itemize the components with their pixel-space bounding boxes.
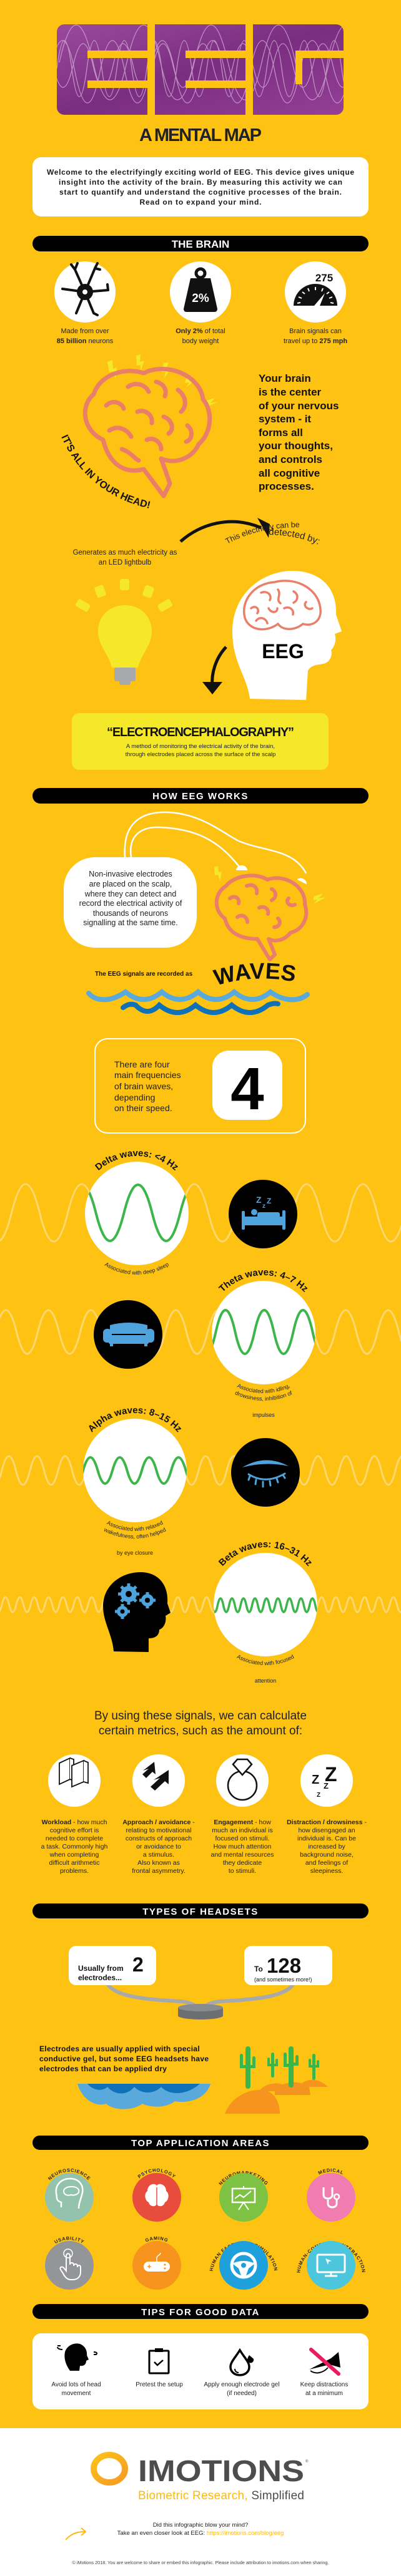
logo: iMotions: ®: [305, 2459, 309, 2464]
app: human factors & simulation: HUMAN FACTORS & SIMULATION: [209, 2242, 277, 2271]
metric: distraction: and feelings of: [305, 1859, 348, 1867]
callout: ELECTROENCEPHALOGRAPHY: through electrodes placed across the surface of the scalp: [126, 751, 275, 758]
metric: distraction: Z: [312, 1773, 319, 1787]
app: medical: MEDICAL: [318, 2169, 342, 2175]
metric: workload: Workload - how much: [42, 1819, 107, 1826]
app: neuromarketing: NEUROMARKETING: [219, 2171, 267, 2185]
heading: TOP APPLICATION AREAS: [32, 2136, 369, 2150]
app: human-computer interaction: [297, 2241, 365, 2290]
panel: four frequencies: There are four: [114, 1059, 170, 1069]
icon: head with gears: [103, 1572, 171, 1652]
panel: four frequencies: of brain waves,: [114, 1081, 173, 1091]
metric: approach avoidance: Also known as: [137, 1859, 180, 1867]
app: gaming: GAMING: [145, 2236, 167, 2242]
text: IT'S ALL IN YOUR HEAD: IT'S ALL IN YOUR HEAD!: [61, 434, 150, 508]
heading: THE BRAIN: THE BRAIN: [172, 238, 229, 250]
intro text box: start to quantify and understand the cognitive processes of the brain.: [59, 188, 342, 197]
tip: pretest setup: Pretest the setup: [136, 2381, 183, 2388]
panel: four frequencies: depending: [114, 1092, 155, 1102]
icon: electrodes: [236, 865, 308, 884]
panel: four frequencies: [95, 1039, 305, 1133]
speech bubble: electrodes text: are placed on the scalp,: [89, 880, 172, 888]
text: brain description: processes.: [259, 480, 314, 492]
metric: approach avoidance: frontal asymmetry.: [132, 1867, 186, 1875]
delta waves: Delta waves: <4 Hz: [95, 1151, 178, 1170]
metric: distraction: Z: [317, 1792, 320, 1799]
text: electrodes gel: conductive gel, but some EEG headsets have: [39, 2054, 209, 2063]
icon: headset band: [107, 1984, 294, 2019]
metric: distraction: Z: [325, 1763, 337, 1786]
theta waves: drowsiness, inhibition of: [235, 1390, 292, 1401]
metric: engagement: How much attention: [214, 1843, 272, 1850]
metric: workload: when completing: [49, 1851, 99, 1859]
subtitle: A MENTAL MAP: A MENTAL MAP: [139, 125, 262, 145]
heading: TYPES OF HEADSETS: [32, 1903, 369, 1918]
metric: approach avoidance: or avoidance to: [136, 1843, 181, 1850]
speech bubble: electrodes text: where they can detect and: [84, 890, 176, 898]
text: brain description: forms all: [259, 427, 303, 439]
tip: electrode gel: (if needed): [227, 2390, 257, 2397]
logo: iMotions: Biometric Research, Simplified: [138, 2489, 304, 2502]
callout: ELECTROENCEPHALOGRAPHY: A method of monitoring the electrical activity of the brain,: [126, 743, 275, 750]
heading: TIPS FOR GOOD DATA: [32, 2304, 369, 2319]
tip: head movement: Avoid lots of head: [51, 2381, 101, 2388]
heading: HOW EEG WORKS: HOW EEG WORKS: [152, 791, 249, 802]
tip: distractions: at a minimum: [305, 2390, 343, 2397]
theta waves: Associated with idling,: [237, 1384, 290, 1393]
text: detected by: detected by:: [269, 528, 320, 544]
callout: ELECTROENCEPHALOGRAPHY: “ELECTROENCEPHALOGRAPHY”: [107, 726, 294, 739]
metric: engagement: to stimuli.: [229, 1867, 256, 1875]
logo: iMotions: [94, 2455, 309, 2502]
panel: four frequencies: main frequencies: [114, 1070, 181, 1080]
metric: distraction: how disengaged an: [298, 1827, 355, 1834]
stat captions: Only 2% of total: [176, 328, 225, 335]
callout: to 128: (and sometimes more!): [254, 1976, 312, 1983]
icon: sleeping in bed: [229, 1180, 297, 1248]
alpha waves: Associated with relaxed: [106, 1520, 163, 1531]
metric: workload: [41, 1754, 108, 1875]
icon: desert cacti: [225, 2046, 328, 2114]
stat: neurons: [54, 261, 116, 323]
icon: sleeping in bed: Z: [267, 1197, 271, 1205]
metric: distraction: background noise,: [300, 1851, 354, 1859]
metric: engagement: focused on stimuli.: [215, 1835, 269, 1842]
intro text box: Read on to expand your mind.: [140, 198, 261, 207]
metric: workload: a task. Commonly high: [41, 1843, 108, 1850]
stat: weight: 2%: [192, 292, 209, 305]
footer call to action: Did this infographic blow your mind?: [153, 2522, 248, 2529]
metric: distraction: individual is. Can be: [297, 1835, 356, 1842]
app: psychology: PSYCHOLOGY: [137, 2169, 176, 2179]
heading: TOP APPLICATION AREAS: TOP APPLICATION AREAS: [131, 2138, 270, 2149]
beta waves: [214, 1542, 317, 1684]
text: LED lightbulb: an LED lightbulb: [99, 559, 151, 566]
speech bubble: electrodes text: record the electrical activity of: [79, 899, 182, 908]
app: human-computer interaction: HUMAN-COMPUTER INTERACTION: [297, 2242, 365, 2273]
tip: distractions: [300, 2350, 348, 2397]
wires: [125, 812, 306, 873]
icon: closed eye: [231, 1438, 300, 1507]
app: psychology: [132, 2169, 181, 2222]
stat captions: Made from over: [61, 328, 109, 335]
alpha waves: wakefulness, often helped: [104, 1527, 166, 1540]
app: usability: USABILITY: [54, 2236, 84, 2243]
text: recorded as WAVES: The EEG signals are recorded as: [95, 971, 193, 978]
app: gaming: [132, 2236, 181, 2290]
text: detected by: This electricity can be: [225, 522, 300, 543]
copyright: © iMotions 2018. You are welcome to share or embed this infographic. Please include attribution to imotions.com when sharing.: [72, 2560, 329, 2565]
metric: approach avoidance: a stimulus.: [143, 1851, 174, 1859]
speech bubble: electrodes text: Non-invasive electrodes: [89, 870, 172, 878]
delta waves: Associated with deep sleep: [104, 1263, 169, 1275]
panel: four frequencies: on their speed.: [114, 1103, 172, 1113]
speech bubble: electrodes text: signalling at the same time.: [83, 918, 178, 927]
metric: workload: difficult arithmetic: [49, 1859, 99, 1867]
text: electrodes gel: [39, 2044, 209, 2073]
metric: approach avoidance: Approach / avoidance -: [122, 1819, 195, 1826]
icon: blue waves: [89, 992, 307, 1013]
speech bubble: electrodes text: thousands of neurons: [93, 909, 168, 918]
icon: lightbulb: [75, 579, 173, 685]
heading: HOW EEG WORKS: [32, 788, 369, 804]
icon: brain with electrodes: [214, 866, 326, 960]
app: neuroscience: [45, 2169, 94, 2222]
text: electrodes gel: Electrodes are usually applied with special: [39, 2044, 200, 2053]
icon: sleeping in bed: z: [262, 1203, 265, 1210]
text: metrics intro: By using these signals, we can calculate: [94, 1709, 307, 1723]
app: usability: [45, 2236, 94, 2290]
panel: tips: [32, 2333, 369, 2409]
metric: engagement: [211, 1754, 274, 1875]
text: brain description: is the center: [259, 386, 322, 398]
intro text box: Welcome to the electrifyingly exciting world of EEG. This device gives unique: [47, 168, 354, 177]
heading: TIPS FOR GOOD DATA: TIPS FOR GOOD DATA: [141, 2307, 260, 2318]
text: recorded as WAVES: WAVES: [212, 963, 295, 984]
text: brain description: of your nervous: [259, 400, 339, 412]
text: brain description: [259, 372, 339, 492]
icon: lightning bolts: [107, 354, 218, 408]
tip: electrode gel: Apply enough electrode gel: [204, 2381, 280, 2388]
icon: head with brain: [232, 571, 342, 700]
icon: big brain: [85, 369, 210, 496]
metric: distraction: increased by: [308, 1843, 346, 1850]
theta waves: [212, 1270, 315, 1418]
tip: head movement: movement: [62, 2390, 91, 2397]
text: brain description: all cognitive: [259, 467, 320, 479]
alpha waves: by eye closure: [117, 1550, 153, 1556]
theta waves: Theta waves: 4–7 Hz: [218, 1270, 307, 1293]
alpha waves: [83, 1408, 187, 1556]
alpha waves: Alpha waves: 8–15 Hz: [89, 1408, 181, 1432]
stat captions: travel up to 275 mph: [284, 338, 347, 345]
icon: head with brain: EEG: [262, 640, 304, 663]
metric: workload: cognitive effort is: [50, 1827, 99, 1834]
metric: workload: needed to complete: [46, 1835, 103, 1842]
text: brain description: system - it: [259, 413, 311, 425]
text: brain description: Your brain: [259, 372, 311, 384]
text: LED lightbulb: Generates as much electricity as: [73, 549, 177, 557]
title: EEG logo: [50, 24, 363, 115]
text: recorded as WAVES: [95, 963, 295, 984]
callout: to 128: 128: [267, 1954, 301, 1977]
metric: engagement: much an individual is: [212, 1827, 273, 1834]
metric: engagement: and mental resources: [211, 1851, 274, 1859]
text: brain description: and controls: [259, 454, 322, 465]
metric: approach avoidance: relating to motivational: [126, 1827, 192, 1834]
icon: couch: [94, 1300, 162, 1369]
metric: approach avoidance: [122, 1754, 195, 1875]
callout: to 128: To: [254, 1965, 263, 1973]
metric: distraction: sleepiness.: [310, 1867, 343, 1875]
text: LED lightbulb: [73, 549, 177, 566]
stat captions: Brain signals can: [289, 328, 342, 335]
callout: from 2 electrodes: [69, 1946, 156, 1985]
text: brain description: your thoughts,: [259, 440, 333, 452]
metric: distraction: Z: [324, 1781, 329, 1791]
arrow: footer: [66, 2528, 86, 2540]
background wave bands: [0, 1184, 401, 1612]
metric: engagement: Engagement - how: [214, 1819, 271, 1826]
icon: gel cloud: [77, 2084, 210, 2109]
text: metrics intro: certain metrics, such as the amount of:: [99, 1724, 302, 1738]
stat: speed: 275: [315, 272, 333, 284]
app: neuromarketing: [219, 2171, 268, 2222]
beta waves: Beta waves: 16–31 Hz: [219, 1542, 312, 1566]
arrow: curved right: [181, 518, 270, 542]
text: electrodes gel: electrodes that can be applied dry: [39, 2064, 167, 2073]
arrow: curved down: [202, 647, 226, 694]
stat: speed: [285, 261, 346, 323]
panel: four frequencies: 4: [230, 1056, 264, 1122]
stat: weight: [170, 261, 231, 323]
metric: distraction: [287, 1754, 367, 1875]
app: medical: [307, 2169, 355, 2222]
icon: sleeping in bed: Z: [256, 1195, 262, 1205]
stat captions: body weight: [182, 338, 219, 345]
callout: ELECTROENCEPHALOGRAPHY: [72, 713, 329, 770]
metric: distraction: Distraction / drowsiness -: [287, 1819, 367, 1826]
app: neuroscience: NEUROSCIENCE: [47, 2169, 91, 2180]
app: human factors & simulation: [209, 2241, 277, 2290]
footer call to action: [117, 2522, 284, 2537]
stat captions: [57, 328, 347, 345]
tip: pretest setup: [136, 2348, 183, 2388]
speech bubble: electrodes text: [64, 857, 197, 948]
heading: TYPES OF HEADSETS: TYPES OF HEADSETS: [142, 1907, 259, 1917]
metric: engagement: they dedicate: [223, 1859, 262, 1867]
stat captions: 85 billion neurons: [57, 338, 114, 345]
beta waves: attention: [255, 1678, 276, 1684]
intro text box: insight into the activity of the brain. By measuring this activity we can: [59, 178, 342, 187]
callout: from 2 electrodes: electrodes...: [78, 1973, 122, 1982]
callout: to 128: [244, 1946, 332, 1985]
metric: approach avoidance: constructs of approach: [126, 1835, 192, 1842]
logo: iMotions: IMOTIONS: [138, 2455, 304, 2488]
tip: distractions: Keep distractions: [300, 2381, 348, 2388]
footer call to action: Take an even closer look at EEG: https://imotions.com/blog/eeg: [117, 2530, 284, 2537]
callout: from 2 electrodes: 2: [132, 1953, 144, 1976]
theta waves: impulses: [252, 1412, 275, 1418]
text: metrics intro: [94, 1709, 307, 1738]
intro text box: [32, 157, 369, 216]
heading: THE BRAIN: [32, 236, 369, 251]
tip: head movement: [51, 2343, 101, 2397]
callout: from 2 electrodes: Usually from: [78, 1964, 124, 1973]
tip: electrode gel: [204, 2350, 280, 2397]
beta waves: Associated with focused: [236, 1655, 294, 1665]
metric: workload: problems.: [60, 1867, 89, 1875]
footer background: [0, 2428, 401, 2576]
delta waves: [85, 1151, 189, 1275]
